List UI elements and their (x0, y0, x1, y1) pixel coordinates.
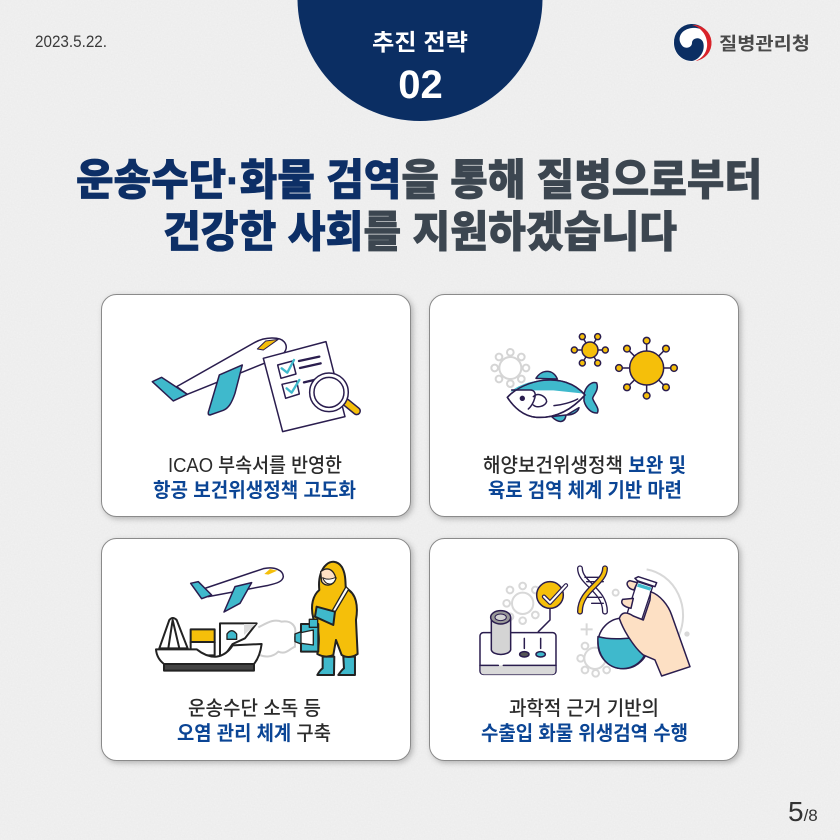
caption: ICAO 부속서를 반영한 (168, 454, 342, 477)
icon: fish and viruses (491, 334, 677, 421)
badge number: 02 (398, 63, 443, 107)
icon: plane, ship and disinfection worker (156, 562, 358, 675)
caption (153, 454, 356, 502)
flask and hand (598, 577, 690, 676)
panel: aviation health policy (102, 294, 410, 516)
smoke (258, 621, 295, 656)
check badge (537, 582, 566, 632)
caption: 오염 관리 체계 구축 (177, 722, 331, 745)
ship (156, 618, 262, 671)
caption: 과학적 근거 기반의 (509, 697, 659, 720)
panel: disinfection and contamination control (102, 538, 410, 760)
caption: 운송수단 소독 등 (188, 697, 321, 720)
background viruses (503, 569, 689, 677)
logo emblem (674, 24, 712, 61)
caption: 해양보건위생정책 보완 및 (483, 454, 686, 477)
panel: science-based cargo inspection (430, 538, 738, 760)
lab device (480, 611, 556, 674)
date: 2023.5.22. (35, 32, 107, 51)
agency logo (674, 24, 810, 61)
worker (295, 562, 358, 675)
title line 1: 운송수단·화물 검역을 통해 질병으로부터 (76, 157, 762, 205)
panel: maritime health and land quarantine (430, 294, 738, 516)
logo wordmark: 질병관리청 (719, 30, 810, 56)
header badge: strategy 02 (298, 0, 542, 121)
title line 2: 건강한 사회를 지원하겠습니다 (163, 209, 677, 257)
title (76, 157, 762, 257)
icon: airplane and checklist (152, 338, 357, 432)
plane (191, 568, 283, 612)
badge label: 추진 전략 (372, 23, 468, 57)
caption (481, 697, 688, 745)
caption: 수출입 화물 위생검역 수행 (481, 722, 688, 745)
page number: 5/8 (788, 796, 818, 827)
caption (483, 454, 686, 502)
DNA helix (580, 568, 605, 612)
caption: 육로 검역 체계 기반 마련 (488, 479, 682, 502)
caption: 항공 보건위생정책 고도화 (153, 479, 356, 502)
icon: lab device, DNA and flask (480, 568, 690, 677)
caption (177, 697, 331, 745)
